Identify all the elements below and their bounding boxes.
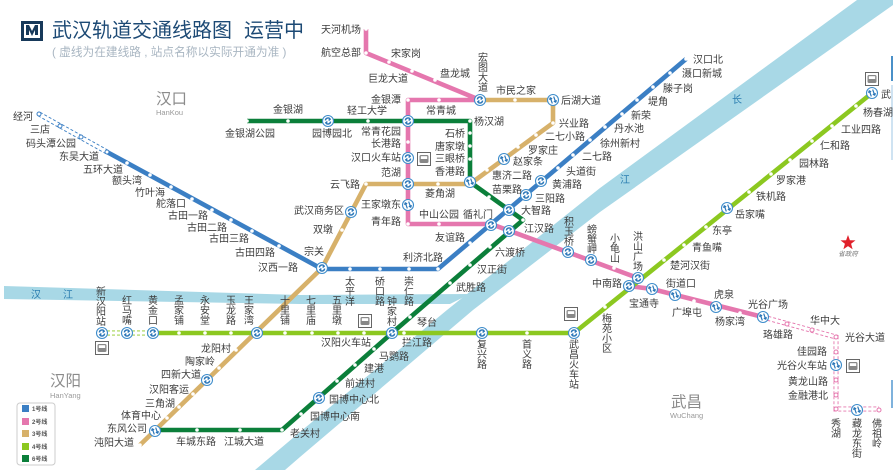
river labels: 汉 (31, 289, 41, 301)
station labels: line 4: 玉龙路 (224, 295, 236, 326)
station labels: line 4: 梅苑小区 (600, 312, 612, 353)
station labels: line 2: 王家墩东 (361, 198, 401, 211)
station labels: line 1: 新荣 (631, 109, 651, 122)
station labels: line 2: 珞雄路 (763, 328, 793, 341)
station labels: line 1: 码头潭公园 (26, 138, 76, 150)
station labels: line 3: 菱角湖 (425, 188, 455, 200)
station labels: line 6: 香港路 (435, 165, 465, 178)
station labels: line 4: 首义路 (520, 338, 532, 370)
station labels: line 2: 光谷火车站 (777, 359, 827, 372)
station labels: line 2: 积玉桥 (562, 216, 574, 247)
station labels: line 6: 金银湖公园 (225, 127, 275, 140)
station labels: line 3: 兴业路 (559, 117, 589, 130)
bus interchange icons (96, 72, 878, 372)
station labels: line 2 (321, 23, 885, 459)
station labels: line 2: 洪山广场 (630, 231, 642, 272)
station labels: line 3: 东风公司 (107, 422, 147, 435)
station labels: line 2: 汉口火车站 (351, 151, 401, 164)
district label: Hanyang: 汉阳 (50, 372, 81, 390)
station labels: line 2: 航空总部 (321, 46, 361, 59)
station labels: line 1: 二七路 (582, 150, 612, 163)
station labels: line 2: 宏图大道 (476, 51, 488, 92)
station labels: line 6: 武胜路 (456, 281, 486, 294)
station labels: line 6: 轻工大学 (347, 104, 387, 117)
station labels: line 2: 秀湖 (828, 418, 840, 439)
station labels: line 1: 汉西一路 (258, 261, 298, 274)
station labels: line 1: 滕子岗 (663, 82, 693, 95)
station labels: line 4: 仁和路 (820, 139, 850, 152)
district label: Hankou: 汉口 (156, 90, 187, 108)
station labels: line 2: 金银潭 (371, 93, 401, 106)
line 1 track and stops (39, 59, 686, 269)
station labels: line 1: 友谊路 (435, 231, 465, 244)
river labels: 江 (620, 174, 630, 186)
station labels: line 1: 苗栗路 (492, 183, 522, 196)
station labels: line 2: 街道口 (666, 277, 696, 290)
station labels: line 4: 七里庙 (304, 295, 316, 326)
station labels: line 2: 中山公园 (419, 208, 459, 221)
station labels: line 1: 宗关 (304, 245, 324, 258)
station labels: line 3: 体育中心 (121, 409, 161, 422)
station labels: line 1: 利济北路 (403, 251, 443, 264)
station labels: line 3: 四新大道 (161, 368, 201, 381)
landmark: provincial government star: 省政府 (838, 250, 859, 258)
station labels: line 2: 光谷大道 (845, 331, 885, 344)
district label: Hanyang (50, 372, 81, 400)
station labels: line 3: 赵家条 (513, 155, 543, 168)
station labels: line 6: 常青花园 (361, 125, 401, 138)
district label: Wuchang: WuChang (670, 411, 703, 420)
station labels: line 2: 佳园路 (797, 345, 827, 358)
river labels: 长 (732, 94, 742, 106)
subtitle note: ( 虚线为在建线路 , 站点名称以实际开通为准 ) (52, 45, 287, 59)
station labels: line 4: 杨春湖 (863, 106, 893, 119)
station labels: line 1: 古田四路 (235, 246, 275, 259)
station labels: line 6: 三眼桥 (435, 153, 465, 165)
station labels: line 4: 武昌火车站 (566, 338, 578, 390)
river: Yangtze (Chang Jiang) (255, 0, 893, 470)
station labels: line 6: 建港 (364, 362, 384, 375)
station labels: line 1: 头道街 (566, 165, 596, 178)
station labels: line 2: 佛祖岭 (870, 417, 882, 449)
station labels: line 2: 宝通寺 (629, 297, 659, 310)
station labels: line 4: 东亭 (712, 224, 732, 237)
station labels: line 4: 五里墩 (330, 295, 342, 326)
district label: Hankou: HanKou (156, 108, 183, 117)
station labels: line 2: 中南路 (592, 277, 622, 290)
station labels: line 2: 范湖 (381, 166, 401, 179)
legend: 4号线 (32, 443, 47, 451)
station labels: line 1: 太平洋 (342, 275, 354, 307)
title status: in operation: 运营中 (244, 19, 304, 42)
station labels: line 6: 石桥 (445, 128, 465, 140)
station labels: line 3: 龙阳村 (201, 342, 231, 355)
station labels: line 4: 复兴路 (474, 338, 486, 370)
station labels: line 1: 三阳路 (535, 192, 565, 205)
station labels: line 4: 园林路 (799, 157, 829, 170)
station labels: line 2: 广埠屯 (672, 306, 702, 319)
station labels: line 1: 徐州新村 (600, 137, 640, 150)
station labels: line 4: 永安堂 (198, 294, 210, 325)
station labels: line 6: 汉正街 (477, 263, 507, 276)
station labels: line 4: 工业四路 (841, 123, 881, 136)
station labels: line 2: 天河机场 (321, 23, 361, 36)
station labels: line 4: 汉阳火车站 (321, 336, 371, 349)
station labels: line 1: 五环大道 (83, 163, 123, 176)
station labels: line 4: 琴台 (417, 316, 437, 329)
station labels: line 1: 古田三路 (209, 232, 249, 245)
line 6 track and stops (155, 121, 523, 430)
station labels: line 4: 楚河汉街 (670, 259, 710, 272)
station labels: line 4: 孟家铺 (172, 295, 184, 326)
station labels: line 4 (94, 88, 893, 390)
station labels: line 6: 杨汉湖 (474, 115, 504, 128)
station labels: line 6: 车城东路 (176, 435, 216, 448)
station labels: line 2: 螃蟹岬 (584, 223, 596, 255)
station labels: line 4: 红马嘴 (120, 294, 132, 326)
legend: 1号线 (32, 405, 47, 413)
station labels: line 3: 沌阳大道 (94, 436, 134, 449)
station labels: line 4: 黄金口 (146, 294, 158, 325)
station labels: line 6: 江城大道 (224, 435, 264, 448)
station labels: line 6: 国博中心南 (310, 410, 360, 423)
station labels: line 2: 虎泉 (714, 288, 734, 301)
station labels: line 4: 钟家村 (384, 295, 396, 326)
station labels: line 3: 云飞路 (330, 178, 360, 191)
station labels: line 1: 三店 (30, 123, 50, 136)
station labels: line 2: 华中大 (810, 314, 840, 327)
district label: Hankou (156, 90, 187, 117)
station labels: line 3: 后湖大道 (561, 94, 601, 107)
station labels: line 1: 古田二路 (187, 221, 227, 234)
station labels: line 1: 堤角 (648, 96, 668, 108)
station labels: line 1 (13, 54, 723, 307)
line 2 track and stops (366, 29, 879, 410)
station labels: line 1: 舵落口 (156, 197, 186, 210)
district label: Hanyang: HanYang (50, 391, 81, 400)
station labels: line 6: 老关村 (290, 427, 320, 440)
station labels: line 1: 经河 (13, 110, 33, 123)
station labels: line 6 (176, 103, 554, 448)
station labels: line 1: 大智路 (521, 204, 551, 217)
legend (17, 403, 55, 465)
station labels: line 6: 园博园北 (312, 127, 352, 140)
station labels: line 2: 金融港北 (788, 389, 828, 402)
page edge marker (891, 56, 893, 408)
station labels: line 2: 巨龙大道 (368, 72, 408, 85)
station labels: line 4: 王家湾 (242, 295, 254, 326)
station labels: line 4: 青鱼嘴 (692, 241, 722, 254)
station labels: line 6: 六渡桥 (495, 246, 525, 259)
station labels: line 3: 武汉商务区 (294, 204, 344, 217)
station labels: line 3: 二七小路 (545, 130, 585, 143)
station labels: line 4: 岳家嘴 (735, 208, 765, 221)
station labels: line 3: 罗家庄 (528, 144, 558, 157)
river: Han Jiang (4, 286, 470, 304)
station labels: line 3: 双墩 (313, 223, 333, 236)
station labels: line 4: 十里铺 (278, 294, 290, 326)
station labels: line 2: 宋家岗 (391, 47, 421, 60)
station labels: line 3: 汉阳客运 (149, 383, 189, 396)
river labels: 江 (63, 289, 73, 301)
station labels: line 2: 长港路 (371, 137, 401, 150)
station labels: line 1: 黄浦路 (552, 178, 582, 191)
station labels: line 4: 新汉阳站 (94, 285, 106, 327)
legend: 6号线 (32, 455, 47, 463)
station labels: line 6: 国博中心北 (329, 393, 379, 406)
station labels: line 2: 常青城 (426, 104, 456, 117)
legend: 3号线 (32, 430, 47, 438)
title: 武汉轨道交通线路图 (52, 19, 232, 42)
landmark: provincial government star (838, 235, 859, 258)
station labels: line 3: 惠济二路 (492, 169, 532, 182)
station labels: line 2: 杨家湾 (715, 315, 745, 328)
station labels: line 2: 黄龙山路 (788, 375, 828, 388)
station labels: line 4: 罗家港 (776, 174, 806, 187)
station labels: line 1: 古田一路 (168, 209, 208, 222)
station labels: line 1: 滠口新城 (682, 67, 722, 80)
station labels: line 4: 拦江路 (402, 336, 432, 349)
metro logo (21, 21, 43, 41)
station labels: line 6: 江汉路 (524, 222, 554, 235)
station labels: line 4: 铁机路 (756, 190, 786, 203)
station labels: line 2: 青年路 (371, 215, 401, 228)
station labels: line 4: 武 (881, 88, 891, 101)
station labels: line 1: 东吴大道 (59, 150, 99, 163)
interchange station icons (96, 88, 878, 436)
station labels: line 2: 盘龙城 (440, 67, 470, 80)
station labels: line 2: 光谷广场 (748, 298, 788, 311)
station labels: line 6: 马鹦路 (379, 350, 409, 363)
station labels: line 1: 硚口路 (372, 276, 384, 307)
station labels: line 6: 前进村 (345, 377, 375, 390)
station labels: line 1: 崇仁路 (402, 276, 414, 307)
station labels: line 6: 金银湖 (273, 103, 303, 116)
line 4 track and stops (102, 93, 872, 333)
legend: 2号线 (32, 418, 47, 426)
station labels: line 1: 丹水池 (614, 122, 644, 135)
river labels (31, 94, 742, 301)
station labels: line 6: 唐家墩 (435, 140, 465, 153)
station labels: line 3: 三角湖 (145, 398, 175, 410)
station labels: line 1: 汉口北 (693, 54, 723, 66)
district label: Wuchang (670, 393, 703, 420)
station labels: line 3: 市民之家 (496, 84, 536, 97)
line 3 track and stops (140, 100, 553, 445)
district label: Wuchang: 武昌 (671, 393, 702, 411)
station labels: line 3 (94, 84, 601, 449)
station labels: line 2: 藏龙东街 (850, 418, 862, 459)
station labels: line 1: 额头湾 (112, 174, 142, 187)
station labels: line 2: 小龟山 (608, 233, 620, 263)
station labels: line 2: 循礼门 (463, 208, 493, 221)
station labels: line 3: 陶家岭 (185, 355, 215, 368)
station labels: line 1: 竹叶海 (135, 186, 165, 199)
